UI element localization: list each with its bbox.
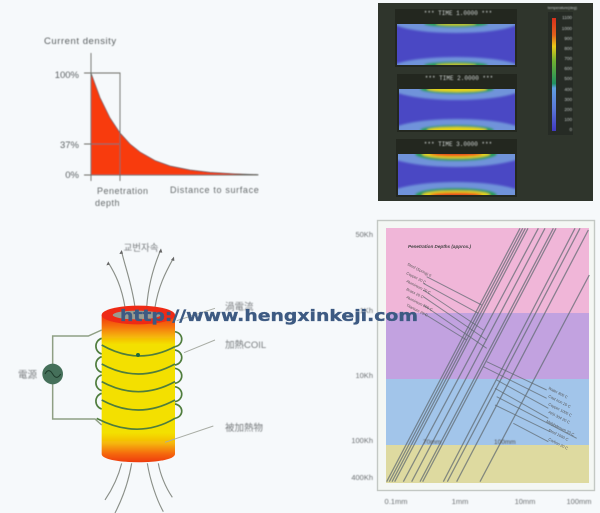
temperature colour scale: 0 xyxy=(569,127,572,132)
penetration depth label: depth xyxy=(95,198,120,208)
temperature colour scale: 700 xyxy=(564,56,572,61)
heat map 1 xyxy=(397,24,515,65)
frequency labels: 50Kh xyxy=(355,230,373,239)
depth axis labels: 10mm xyxy=(515,497,535,506)
leader lines xyxy=(165,308,215,442)
label: workpiece: 被加熱物 xyxy=(225,422,264,434)
frequency labels: 1Kh xyxy=(360,306,373,315)
AC power source xyxy=(42,364,63,384)
material labels, left: Copper 20 C xyxy=(406,271,427,285)
temperature colour scale: 600 xyxy=(564,66,572,71)
temperature colour scale: 900 xyxy=(564,36,572,41)
temperature colour scale: temperature(deg) xyxy=(548,6,578,10)
temperature colour scale: 200 xyxy=(564,107,572,112)
material labels, right: Carbon 20 C xyxy=(548,437,569,451)
heat map 2 xyxy=(399,89,515,130)
temperature colour scale: 400 xyxy=(564,87,572,92)
coil labels xyxy=(18,243,266,434)
chart title: Penetration Depths (approx.) xyxy=(408,244,472,249)
temperature colour scale: 800 xyxy=(564,46,572,51)
material labels, left: Steel (Spring) 0 xyxy=(407,262,432,278)
material labels, left: Aluminium 500 C xyxy=(406,295,433,312)
x axis label: Distance to surface xyxy=(170,185,259,195)
panel background xyxy=(378,3,593,201)
heat map time captions: *** TIME 3.0000 *** xyxy=(424,141,492,148)
material labels, left: Brass 20 C xyxy=(406,287,424,300)
frequency labels: 100Kh xyxy=(351,436,373,445)
heat map time captions: *** TIME 2.0000 *** xyxy=(425,75,493,82)
temperature colour scale: 100 xyxy=(564,117,572,122)
chart axes and guide lines xyxy=(84,53,258,181)
heat map time captions: *** TIME 1.0000 *** xyxy=(424,10,492,17)
depth axis labels: 1mm xyxy=(452,497,468,506)
workpiece cylinder xyxy=(102,306,175,462)
watermark URL: http://www.hengxinkeji.com xyxy=(120,306,418,325)
axis title: Current density xyxy=(44,36,117,47)
frequency bands xyxy=(386,228,589,483)
chart: current density decay xyxy=(44,36,259,208)
material labels, right: Copper 1000 C xyxy=(548,402,573,418)
depth curves xyxy=(387,228,589,482)
temperature colour scale: 1000 xyxy=(562,26,572,31)
coil centre dot xyxy=(136,353,140,357)
heating coil xyxy=(96,332,182,429)
chart area: red decay curve xyxy=(91,73,258,175)
heat map time captions xyxy=(424,10,493,148)
label: alternating magnetic flux: 교번자속 xyxy=(124,243,159,254)
tick labels xyxy=(55,70,80,181)
material labels, right: Steel 1000 C xyxy=(548,428,569,442)
label: heating coil: 加熱COIL xyxy=(225,339,266,351)
tick labels: 0% xyxy=(65,170,80,181)
chart: penetration depth vs frequency xyxy=(351,220,594,506)
depth axis labels: 0.1mm xyxy=(385,497,407,506)
temperature colour scale: 1100 xyxy=(562,15,572,20)
band depth annotations xyxy=(423,439,516,446)
depth axis labels xyxy=(385,497,592,506)
heat map backing panels xyxy=(395,9,517,197)
penetration depth label: Penetration xyxy=(97,186,149,196)
label: eddy current: 渦電流 xyxy=(225,301,254,313)
material labels, right xyxy=(546,386,575,451)
chart frame xyxy=(378,220,594,490)
material labels, right: AISI 304 20 C xyxy=(548,410,571,425)
material leader lines xyxy=(423,277,577,442)
field line arrowheads xyxy=(106,248,174,265)
material labels, right: Cast Iron 20 C xyxy=(548,394,571,409)
material labels, right: Water 800 C xyxy=(548,386,568,400)
band depth annotations: 100mm xyxy=(494,439,516,446)
tick labels: 37% xyxy=(60,140,80,151)
band depth annotations: 70mm xyxy=(423,439,441,446)
temperature colour scale xyxy=(548,6,578,135)
material labels, left: Titanium 20 C xyxy=(406,303,429,318)
power source wires xyxy=(53,330,102,425)
frequency labels: 10Kh xyxy=(355,371,373,380)
frequency labels: 400Kh xyxy=(351,473,373,482)
frequency labels xyxy=(351,230,373,482)
depth axis labels: 100mm xyxy=(566,497,592,506)
tick labels: 100% xyxy=(55,70,80,81)
material labels, right: Molybdenum 20 C xyxy=(546,419,575,437)
temperature colour scale: 500 xyxy=(564,76,572,81)
label: power supply: 電源 xyxy=(18,369,38,381)
magnetic field lines xyxy=(105,250,173,513)
material labels, left xyxy=(406,262,433,318)
material labels, left: Aluminium 20 C xyxy=(406,279,431,295)
temperature colour scale: 300 xyxy=(564,97,572,102)
diagram: induction coil xyxy=(42,248,215,513)
panel: temperature simulation xyxy=(378,3,593,216)
heat map 3 xyxy=(398,154,515,195)
